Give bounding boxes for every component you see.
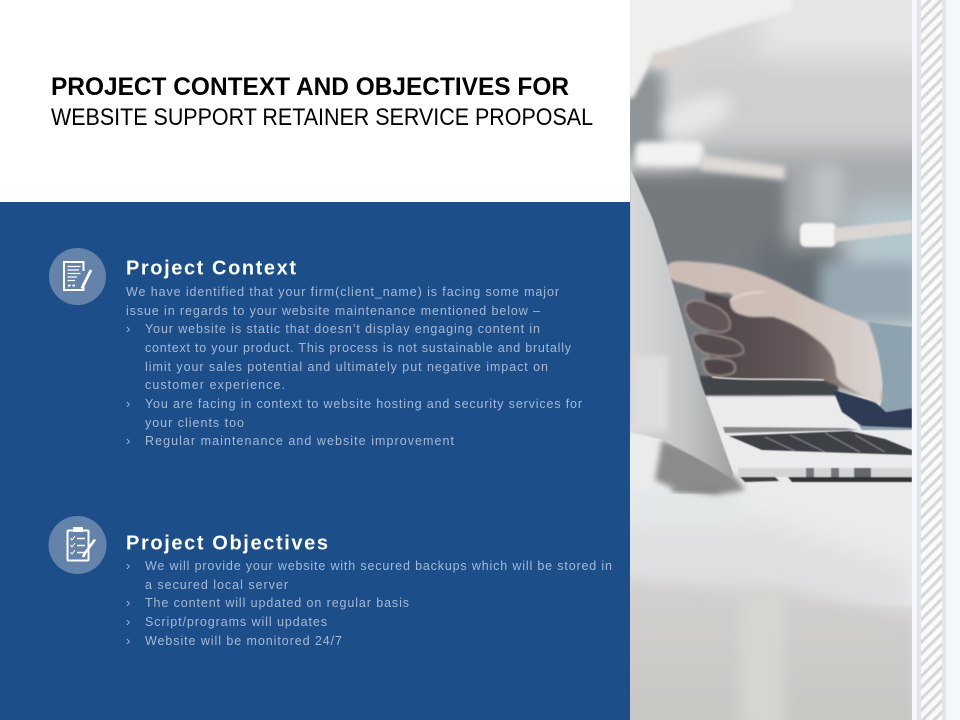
hand	[666, 261, 882, 404]
text block: project objectives list: ›	[126, 559, 130, 573]
text block: project context body: ›	[126, 322, 130, 336]
foreground laptop screen	[630, 168, 733, 478]
icon: document with pen	[49, 248, 106, 305]
keyboard	[723, 427, 912, 455]
text block: project objectives list: The content will updated on regular basis	[145, 596, 409, 610]
text block: project objectives list	[126, 559, 612, 648]
right margin tint	[912, 0, 960, 720]
text block: project objectives list: Website will be monitored 24/7	[145, 634, 342, 648]
text block: project objectives list: Script/programs will updates	[145, 615, 327, 629]
heading: project context: Project Context	[126, 258, 296, 280]
text block: project context body: issue in regards to your website maintenance mentioned below –	[126, 304, 540, 318]
heading: project objectives: Project Objectives	[126, 532, 328, 554]
section: project objectives	[126, 532, 612, 648]
text block: project context body: ›	[126, 434, 130, 448]
laptop stand shadow	[655, 440, 745, 495]
text block: project context body: Your website is static that doesn’t display engaging content in	[145, 322, 540, 336]
hatched vertical stripe	[917, 0, 946, 720]
text block: project objectives list: ›	[126, 596, 130, 610]
lower hand edge	[712, 377, 824, 380]
text block: project objectives list: a secured local server	[145, 578, 288, 592]
text block: project objectives list: ›	[126, 615, 130, 629]
laptop front edge	[738, 468, 912, 482]
small object left	[630, 396, 631, 414]
icon: clipboard checklist with pen	[48, 516, 106, 574]
title	[51, 73, 593, 131]
desk surface	[620, 396, 920, 720]
title: PROJECT CONTEXT AND OBJECTIVES FOR	[51, 73, 569, 101]
text block: project context body: We have identified that your firm(client_name) is facing some major	[126, 285, 559, 299]
knuckle crease	[730, 292, 765, 301]
title: WEBSITE SUPPORT RETAINER SERVICE PROPOSAL	[51, 104, 593, 131]
photo: hand pointing at laptop	[630, 0, 912, 720]
soft backdrop	[630, 0, 912, 398]
section: project context	[126, 258, 582, 448]
text block: project objectives list: We will provide your website with secured backups which will be stored in	[145, 559, 612, 573]
palm shadow	[705, 292, 884, 400]
text block: project context body: customer experience.	[145, 378, 285, 392]
text block: project context body: context to your product. This process is not sustainable and brutally	[145, 341, 572, 355]
text block: project context body	[126, 285, 582, 448]
text block: project context body: Regular maintenance and website improvement	[145, 434, 455, 448]
text block: project context body: You are facing in context to website hosting and security services for	[145, 397, 582, 411]
fingers	[685, 301, 743, 376]
text block: project context body: ›	[126, 397, 130, 411]
text block: project context body: your clients too	[145, 416, 244, 430]
blue content panel	[0, 202, 630, 720]
sleeve	[833, 322, 912, 430]
text block: project context body: limit your sales potential and ultimately put negative impact on	[145, 360, 548, 374]
dark band under hand	[700, 376, 838, 396]
text block: project objectives list: ›	[126, 634, 130, 648]
